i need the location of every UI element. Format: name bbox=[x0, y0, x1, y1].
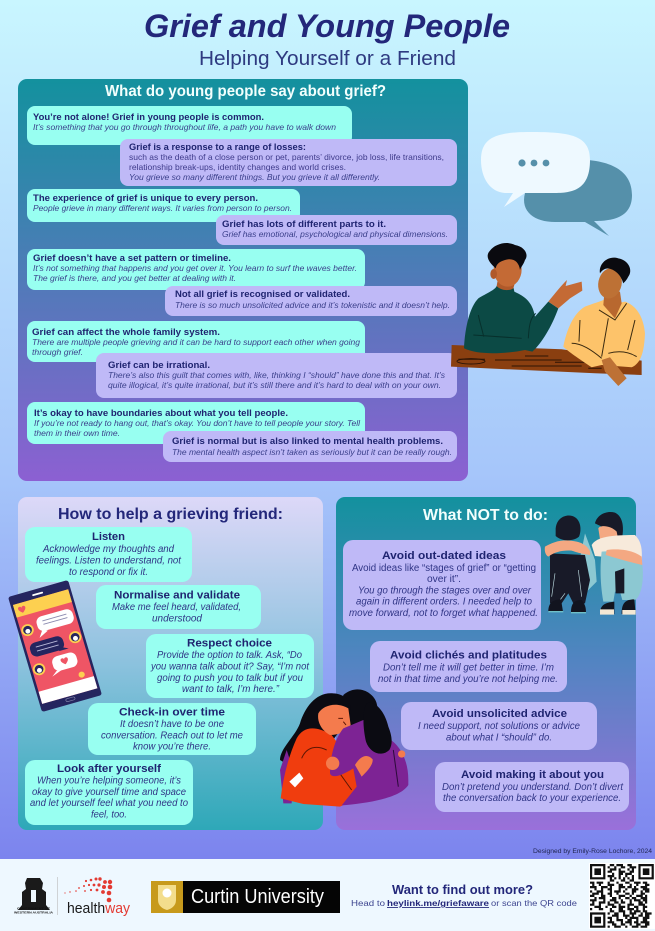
tip: check-in over time: know you’re there. bbox=[133, 742, 211, 752]
quote: irrational: There’s also this guilt that comes with, like, thinking I “should” have done this and that. It’s bbox=[108, 370, 446, 380]
panel: what do young people say about grief bbox=[18, 79, 468, 481]
logo: Curtin University: Curtin University bbox=[191, 886, 324, 908]
tip: unsolicited advice: Avoid unsolicited advice bbox=[432, 708, 567, 720]
illustration: two young people talking at a table bbox=[451, 243, 645, 386]
quote: not recognised bbox=[165, 286, 457, 316]
title: Grief and Young People bbox=[144, 8, 510, 44]
tip: listen: Acknowledge my thoughts and bbox=[42, 544, 174, 555]
quote: not alone: You’re not alone! Grief in young people is common. bbox=[33, 112, 264, 123]
tip: listen: to respond or fix it. bbox=[69, 567, 148, 578]
tip: respect choice: Provide the option to talk. Ask, “Do bbox=[157, 650, 302, 661]
quote: not alone bbox=[27, 106, 352, 145]
tip: check-in over time: Check-in over time bbox=[119, 706, 225, 718]
quote: mental health: Grief is normal but is also linked to mental health problems. bbox=[172, 436, 443, 447]
tip: check-in over time: conversation. Reach out to let me bbox=[101, 730, 243, 742]
tip: making it about you: Avoid making it about you bbox=[461, 769, 604, 781]
tip: look after yourself: When you’re helping someone, it’s bbox=[37, 776, 181, 786]
quote: whole family: There are multiple people grieving and it can be hard to support each other when going bbox=[32, 337, 360, 347]
tip: cliches and platitudes bbox=[370, 641, 567, 692]
call to action: heylink.me/griefaware bbox=[387, 898, 489, 908]
tip: cliches and platitudes: not in that time and you’re not helping me. bbox=[378, 674, 558, 685]
logo: Government of Western Australia: GOVERNMENT OF bbox=[17, 906, 50, 910]
tip: respect choice: Respect choice bbox=[187, 638, 272, 650]
quote: irrational: Grief can be irrational. bbox=[108, 360, 210, 371]
quote: no set pattern bbox=[27, 249, 365, 290]
panel: what not to do bbox=[336, 497, 636, 830]
quote: not recognised: There is so much unsolicited advice and it’s tokenistic and it doesn’t help. bbox=[175, 300, 450, 310]
quote: irrational bbox=[96, 353, 457, 398]
tip: out-dated ideas: again in different orders. I needed help to bbox=[356, 596, 532, 608]
tip: out-dated ideas: Avoid ideas like “stages of grief” or “getting bbox=[352, 563, 536, 574]
tip: out-dated ideas: move forward, not to forget what happened. bbox=[349, 608, 538, 619]
quote: unique bbox=[27, 189, 300, 222]
quote: irrational: quite illogical, it’s quite irrational, but it’s still there and it’s hard to deal with on your own. bbox=[108, 380, 441, 390]
logo: Government of Western Australia: WESTERN AUSTRALIA bbox=[14, 910, 53, 914]
tip: normalise and validate: Make me feel heard, validated, bbox=[112, 602, 241, 613]
tip: respect choice bbox=[146, 634, 314, 698]
tip: respect choice: going to push you to talk but if you bbox=[157, 673, 303, 684]
quote: whole family: Grief can affect the whole family system. bbox=[32, 327, 220, 338]
tip: look after yourself: feel, too. bbox=[91, 810, 127, 820]
quote: unique: The experience of grief is unique to every person. bbox=[33, 193, 258, 204]
logo: healthway: healthway bbox=[67, 900, 130, 917]
quote: not recognised: Not all grief is recognised or validated. bbox=[175, 289, 350, 300]
call to action: Head to bbox=[351, 898, 385, 908]
quote: no set pattern: Grief doesn’t have a set pattern or timeline. bbox=[33, 253, 231, 264]
tip: cliches and platitudes: Don’t tell me it will get better in time. I’m bbox=[383, 662, 554, 674]
tip: look after yourself: and let yourself feel what you need to bbox=[30, 798, 188, 809]
call to action bbox=[351, 883, 577, 908]
quote: boundaries: If you’re not ready to hang out, that’s okay. You don’t have to tell people your story. Tell bbox=[34, 418, 361, 428]
quote: range of losses: such as the death of a close person or pet, parents’ divorce, job loss, life transitions, bbox=[129, 152, 444, 162]
tip: making it about you bbox=[435, 762, 629, 812]
quote: range of losses: relationship break-ups, identity changes and world crises. bbox=[129, 162, 346, 172]
quote: range of losses bbox=[120, 139, 457, 186]
tip: look after yourself: okay to give yourself time and space bbox=[32, 787, 186, 798]
footer band bbox=[0, 859, 655, 931]
tip: unsolicited advice bbox=[401, 702, 597, 750]
tip: check-in over time: It doesn’t have to be one bbox=[120, 719, 224, 730]
quote: no set pattern: It’s not something that happens and you get over it. You learn to surf the waves better. bbox=[33, 263, 357, 273]
quote: not alone: It’s something that you go through throughout life, a path you have to walk down bbox=[33, 122, 336, 132]
tip: check-in over time bbox=[88, 703, 256, 755]
tip: normalise and validate bbox=[96, 585, 261, 629]
credit line: Designed by Emily-Rose Lochore, 2024 bbox=[533, 848, 653, 855]
quote: boundaries: It’s okay to have boundaries about what you tell people. bbox=[34, 408, 288, 419]
tip: out-dated ideas: Avoid out-dated ideas bbox=[382, 550, 506, 562]
tip: listen: Listen bbox=[92, 531, 125, 543]
quote: different parts: Grief has lots of different parts to it. bbox=[222, 219, 386, 230]
illustration: two teens sitting, one comforting the other bbox=[545, 512, 643, 615]
QR code bbox=[589, 863, 655, 929]
panel heading: What NOT to do: bbox=[423, 507, 548, 524]
illustration: phone with chat messages bbox=[8, 580, 102, 712]
quote: no set pattern: The grief is there, and you get better at dealing with it. bbox=[33, 273, 236, 283]
quote: boundaries: them in their own time. bbox=[34, 428, 120, 438]
tip: listen: feelings. Listen to understand, not bbox=[36, 556, 182, 566]
illustration: two friends hugging bbox=[280, 689, 408, 807]
quote: whole family: through grief. bbox=[32, 347, 83, 357]
panel heading: How to help a grieving friend: bbox=[58, 506, 283, 523]
tip: making it about you: Don’t pretend you understand. Don’t divert bbox=[442, 782, 624, 793]
quote: different parts: Grief has emotional, psychological and physical dimensions. bbox=[222, 229, 448, 239]
tip: unsolicited advice: I need support, not solutions or advice bbox=[418, 721, 580, 732]
tip: out-dated ideas: You go through the stages over and over bbox=[358, 586, 532, 596]
tip: normalise and validate: Normalise and validate bbox=[114, 590, 240, 602]
subtitle: Helping Yourself or a Friend bbox=[199, 48, 456, 70]
tip: respect choice: want to talk, I’m here.” bbox=[182, 684, 280, 695]
tip: listen bbox=[25, 527, 192, 582]
tip: unsolicited advice: about what I “should” do. bbox=[446, 732, 552, 744]
tip: respect choice: you wanna talk about it? Say, “I’m not bbox=[150, 662, 310, 672]
illustration: speech bubbles bbox=[481, 132, 632, 236]
tip: look after yourself bbox=[25, 760, 193, 825]
tip: cliches and platitudes: Avoid clichés and platitudes bbox=[390, 650, 547, 662]
call to action: Want to find out more? bbox=[392, 883, 533, 897]
quote: mental health: The mental health aspect isn’t taken as seriously but it can be really rough. bbox=[172, 447, 452, 457]
tip: out-dated ideas: over it”. bbox=[427, 574, 461, 585]
quote: boundaries bbox=[27, 402, 365, 444]
logo: Government of Western Australia bbox=[14, 878, 53, 914]
quote: mental health bbox=[163, 431, 457, 462]
tip: normalise and validate: understood bbox=[152, 614, 202, 624]
call to action: or scan the QR code bbox=[491, 898, 577, 908]
logo: Curtin University bbox=[151, 881, 340, 913]
tip: look after yourself: Look after yourself bbox=[57, 763, 161, 775]
quote: range of losses: Grief is a response to a range of losses: bbox=[129, 142, 306, 153]
tip: out-dated ideas bbox=[343, 540, 541, 630]
panel: how to help a grieving friend bbox=[18, 497, 323, 830]
logo: healthway bbox=[64, 877, 130, 917]
quote: whole family bbox=[27, 321, 365, 362]
quote: different parts bbox=[216, 215, 457, 245]
quote: range of losses: You grieve so many different things. But you grieve it all differently. bbox=[129, 172, 380, 182]
tip: making it about you: the conversation back to your experience. bbox=[443, 793, 621, 804]
quote: unique: People grieve in many different ways. It varies from person to person. bbox=[33, 203, 292, 213]
panel heading: What do young people say about grief? bbox=[105, 83, 386, 100]
